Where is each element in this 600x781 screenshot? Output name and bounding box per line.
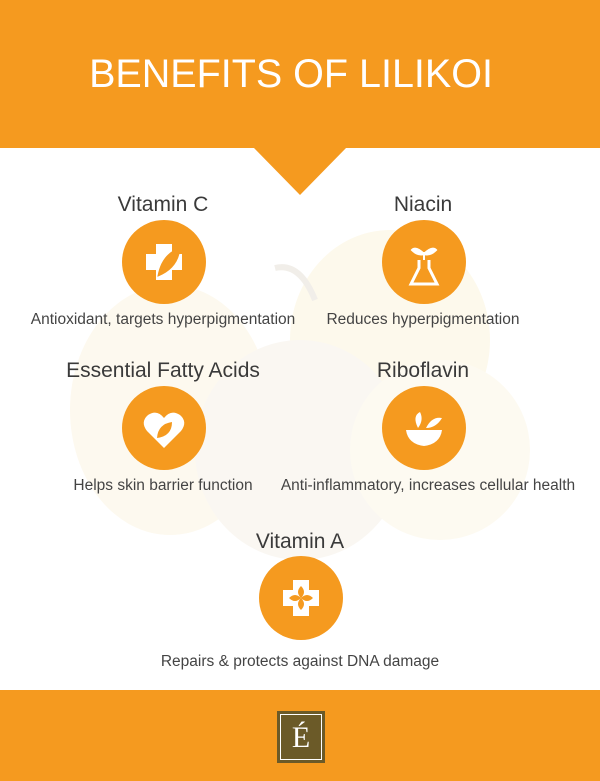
logo: É — [292, 721, 310, 754]
title: BENEFITS OF LILIKOI — [89, 52, 493, 96]
icon: heart leaf — [122, 386, 206, 470]
text: Niacin: Reduces hyperpigmentation — [326, 311, 520, 328]
text: Essential Fatty Acids: Helps skin barrier function — [73, 477, 253, 494]
icon: plus flower — [259, 556, 343, 640]
icon: flask — [382, 220, 466, 304]
text: Riboflavin: Anti-inflammatory, increases cellular health — [281, 477, 575, 494]
heading: Vitamin A: Vitamin A — [256, 530, 344, 553]
footer — [0, 690, 600, 781]
heading: Riboflavin: Riboflavin — [377, 359, 469, 382]
heading: Essential Fatty Acids: Essential Fatty Acids — [66, 359, 260, 382]
text: Vitamin A: Repairs & protects against DNA damage — [161, 653, 439, 670]
logo — [277, 711, 325, 763]
heading: Vitamin C: Vitamin C — [118, 193, 208, 216]
heading: Niacin: Niacin — [394, 193, 452, 216]
header — [0, 0, 600, 148]
header pointer — [253, 147, 347, 195]
icon: mortar — [382, 386, 466, 470]
text: Vitamin C: Antioxidant, targets hyperpigmentation — [31, 311, 295, 328]
icon: plus leaf — [122, 220, 206, 304]
